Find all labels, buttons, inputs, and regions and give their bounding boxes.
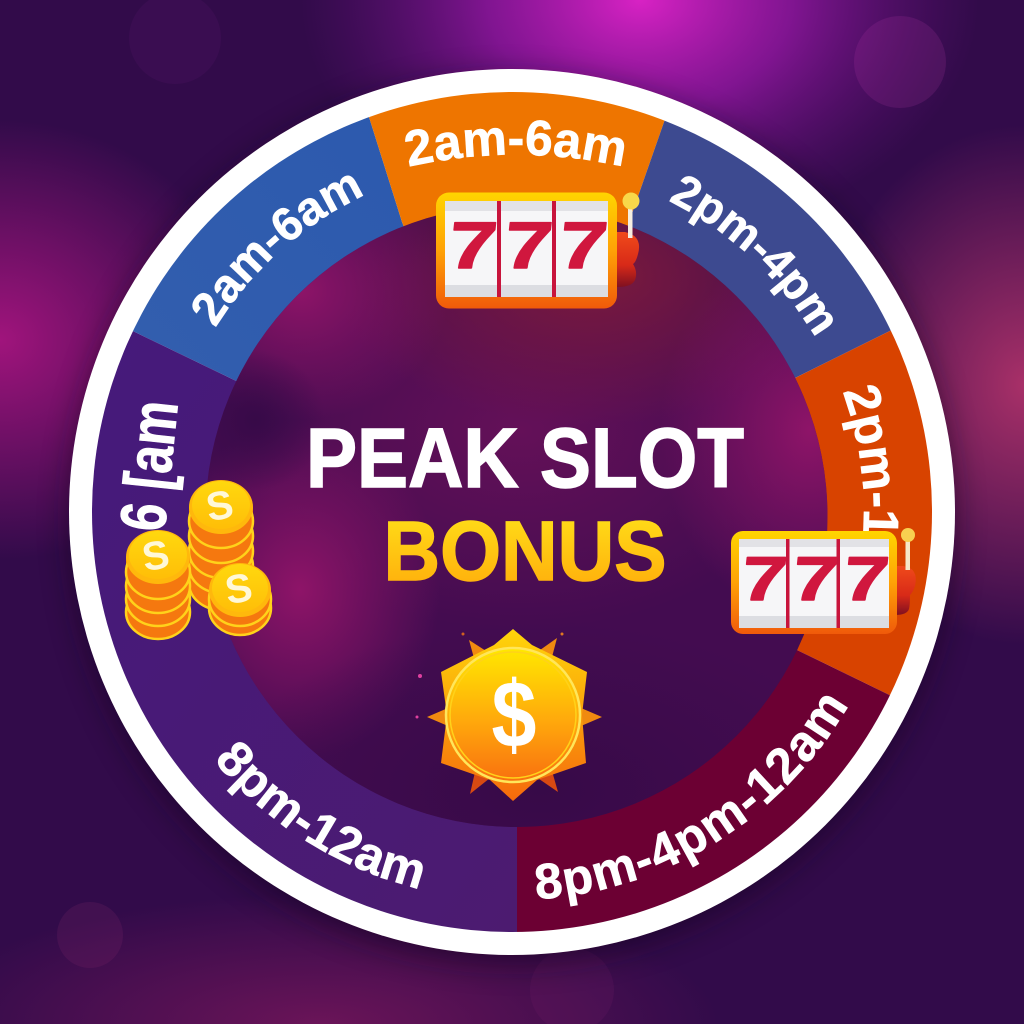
segment: red orange bbox=[795, 330, 932, 696]
segment: purple bbox=[92, 331, 517, 932]
label: blue 2am-6am: 2am-6am bbox=[192, 176, 364, 327]
icon: slot machine top: 7 bbox=[445, 209, 501, 283]
icon: slot machine top: 7 bbox=[501, 209, 556, 283]
icon: sun dollar coin bbox=[416, 629, 602, 801]
icon: coin stacks: S bbox=[203, 482, 237, 530]
label: top 2am-6am: 2am-6am bbox=[405, 120, 624, 167]
icon: coin stacks: S bbox=[139, 532, 173, 580]
coin stack: front left bbox=[126, 530, 190, 639]
label: red orange 2pm-1: 2pm-1 bbox=[842, 385, 898, 531]
segment: orange bbox=[369, 92, 664, 226]
coin stack: back bbox=[189, 480, 253, 610]
coin stack: front right bbox=[209, 563, 271, 635]
icon: slot machine right bbox=[731, 528, 916, 634]
title: bonus: BONUS bbox=[384, 504, 666, 598]
label: navy 2pm-4pm: 2pm-4pm bbox=[669, 176, 833, 336]
segment: navy bbox=[628, 120, 891, 378]
label: purple 8pm-12am: 8pm-12am bbox=[218, 742, 423, 889]
icon: slot machine right: 7 bbox=[738, 545, 790, 614]
icon: slot machine top bbox=[436, 192, 640, 308]
wheel segments bbox=[92, 92, 932, 932]
label: left 6 am: 6 [am bbox=[107, 397, 192, 534]
label: maroon 8pm-4pm-12am: 8pm-4pm-12am bbox=[536, 696, 848, 906]
icon: sun dollar coin: $ bbox=[492, 661, 536, 767]
wheel outer white ring bbox=[67, 69, 957, 965]
icon: coin stacks bbox=[126, 480, 271, 639]
icon: slot machine top: 7 bbox=[556, 209, 611, 283]
title: peak slot: PEAK SLOT bbox=[306, 411, 744, 505]
segment: maroon bbox=[517, 650, 890, 932]
center disc bbox=[208, 216, 828, 827]
segment: blue bbox=[133, 117, 404, 381]
icon: coin stacks: S bbox=[222, 565, 256, 613]
icon: slot machine right: 7 bbox=[840, 545, 892, 614]
icon: slot machine right: 7 bbox=[789, 545, 841, 614]
